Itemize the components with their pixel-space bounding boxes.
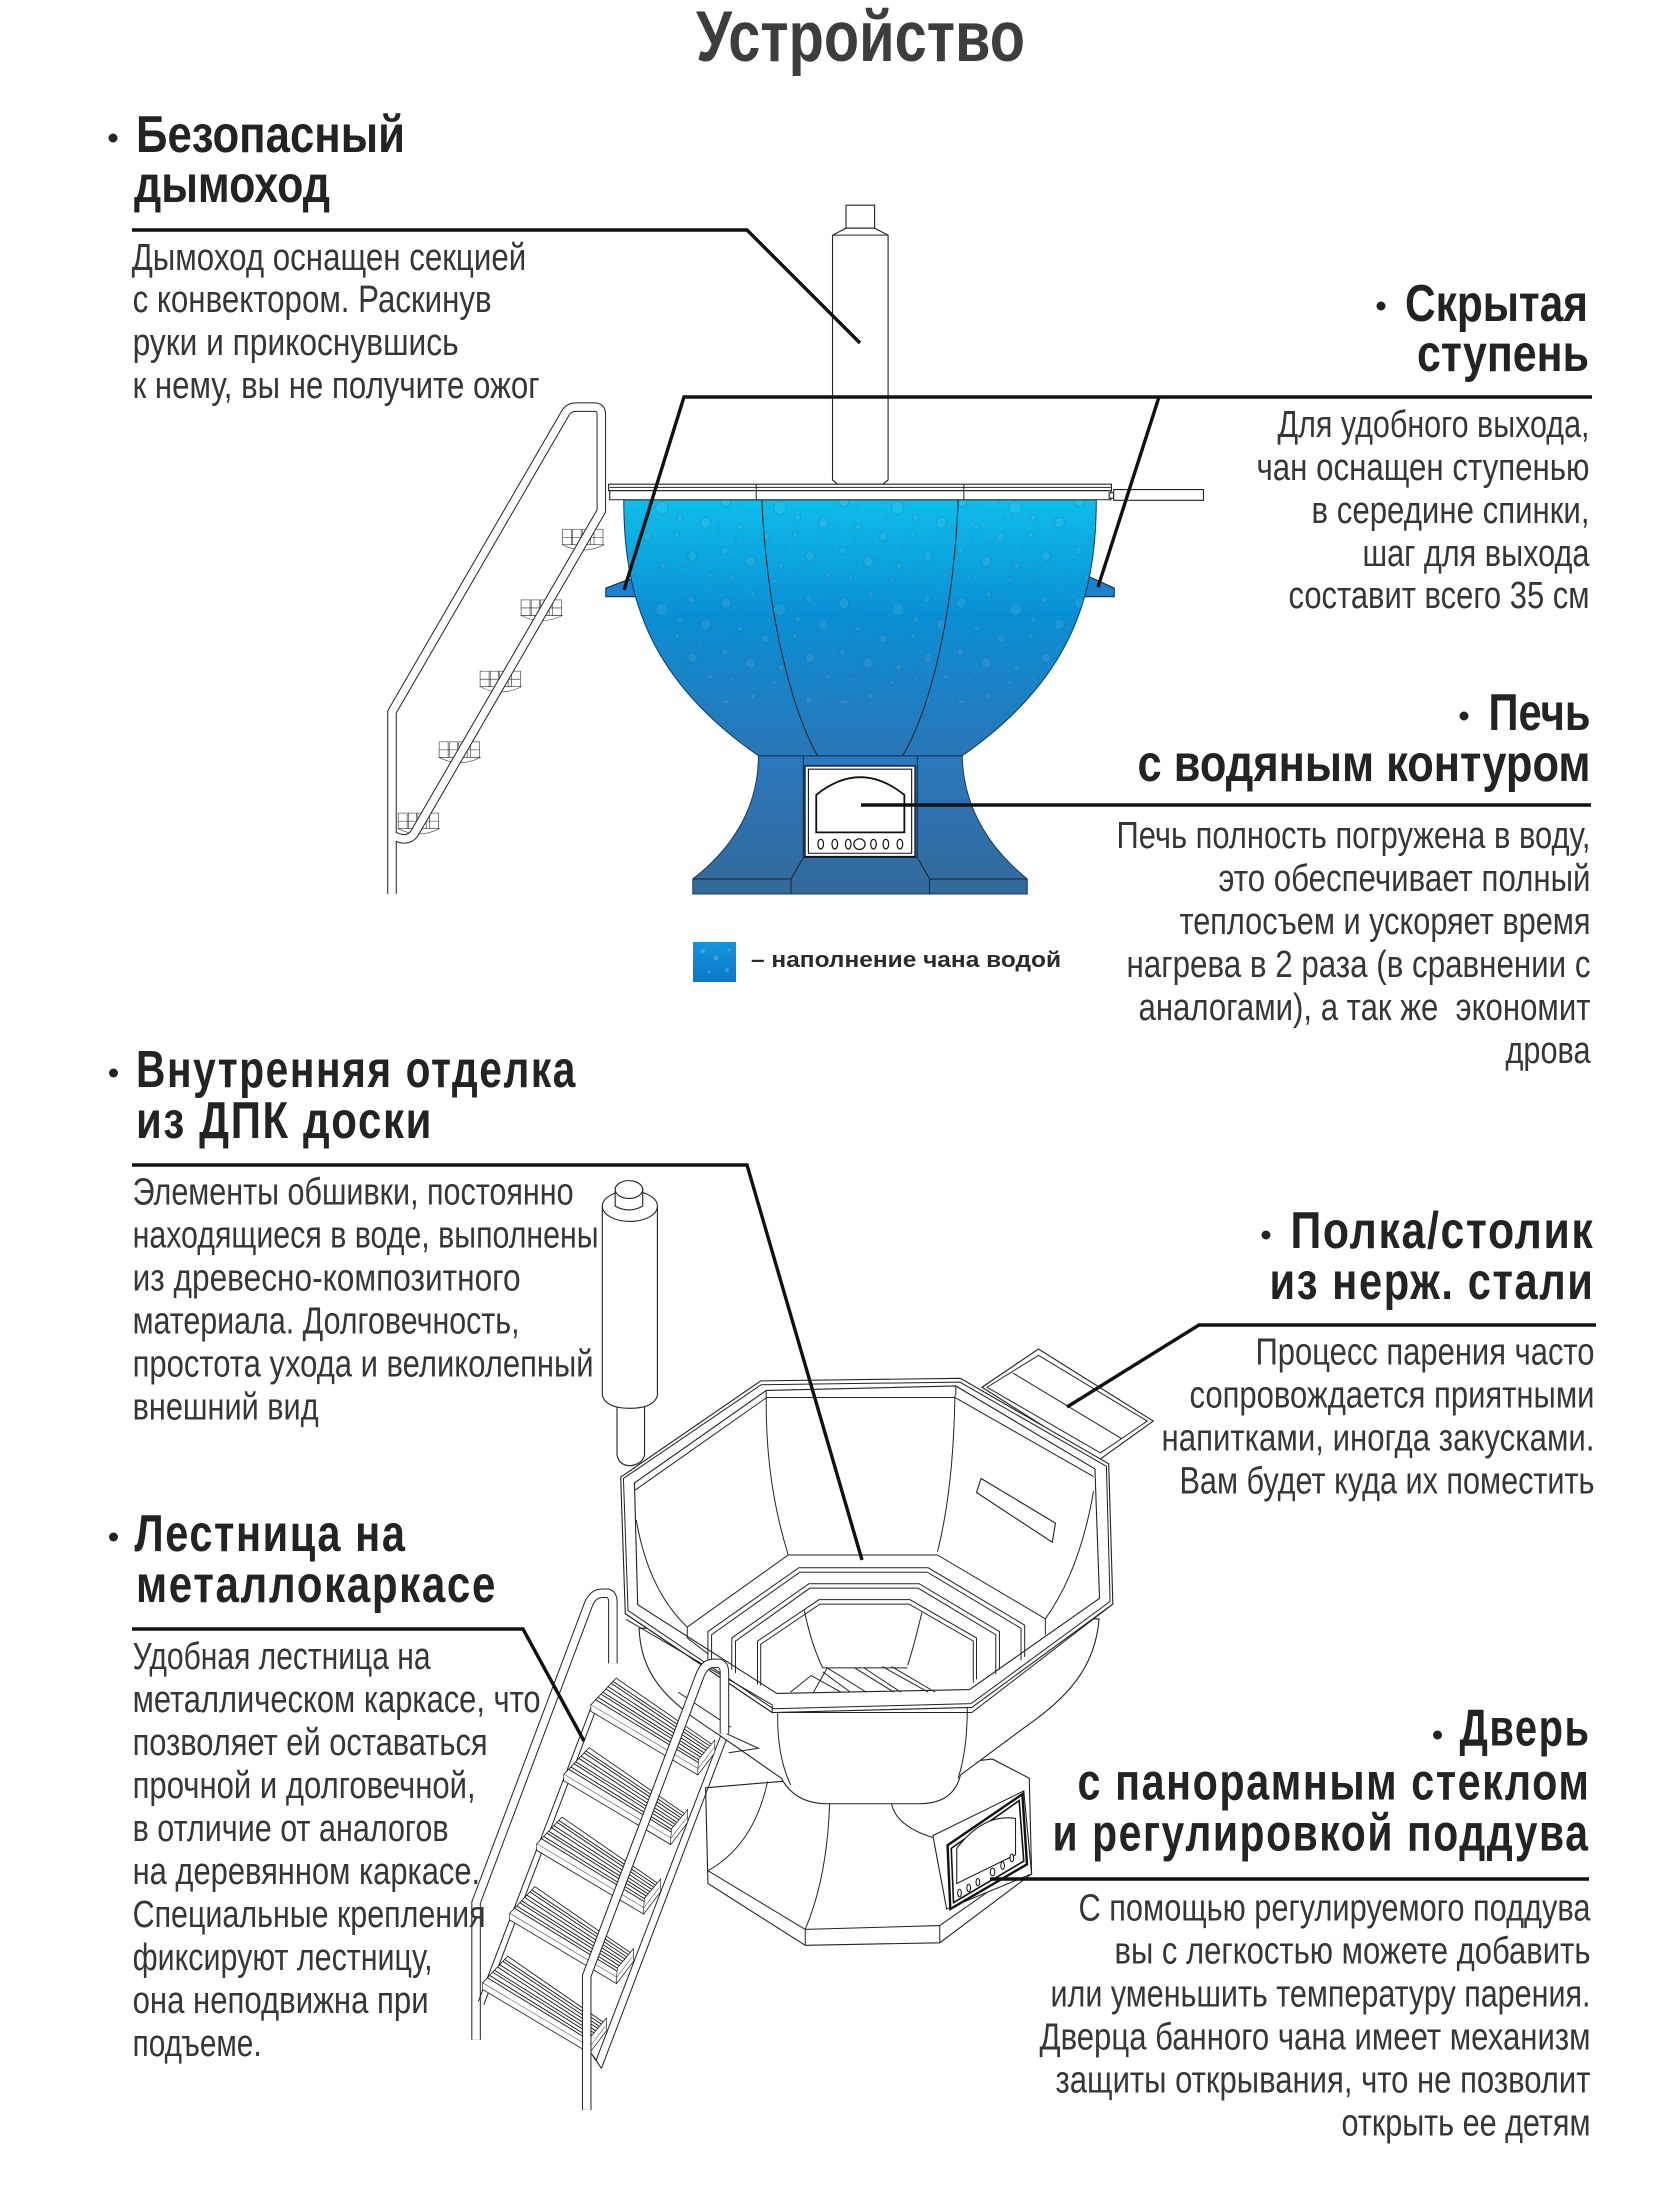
heading <box>134 106 405 214</box>
small bracket <box>678 1692 758 1753</box>
text block: с конвектором. Раскинув <box>133 279 492 321</box>
heading: Скрытая <box>1405 275 1588 333</box>
stairs <box>476 1593 726 2110</box>
stove door <box>933 1791 1032 1909</box>
text block: простота ухода и великолепный <box>133 1343 594 1385</box>
text block: Удобная лестница на <box>133 1636 431 1678</box>
panel: shelf <box>1067 1202 1596 1502</box>
text block: позволяет ей оставаться <box>133 1722 488 1764</box>
heading <box>136 1041 577 1150</box>
text block: аналогами), а так же экономит <box>1138 987 1590 1029</box>
heading <box>1138 684 1590 793</box>
text block <box>1040 1887 1591 2144</box>
heading <box>1405 275 1589 383</box>
wall niche <box>976 1478 1055 1542</box>
heading: Дверь <box>1460 1699 1590 1757</box>
leader lines <box>624 397 1592 590</box>
panel: door <box>990 1699 1591 2144</box>
heading: Внутренняя отделка <box>136 1041 577 1099</box>
text block: дрова <box>1506 1030 1591 1072</box>
heading: с водяным контуром <box>1138 735 1590 793</box>
heading: ступень <box>1417 325 1589 383</box>
text block <box>133 1171 599 1428</box>
steel shelf <box>982 1349 1153 1461</box>
text block: Вам будет куда их поместить <box>1180 1460 1594 1502</box>
heading: из нерж. стали <box>1270 1253 1594 1311</box>
text block: находящиеся в воде, выполнены <box>133 1214 599 1256</box>
title: Устройство <box>696 0 1025 77</box>
text block: руки и прикоснувшись <box>133 322 459 364</box>
text block: вы с легкостью можете добавить <box>1114 1930 1590 1972</box>
floor slats <box>791 1667 935 1692</box>
panel: chimney <box>108 106 860 407</box>
heading: Полка/столик <box>1290 1202 1594 1260</box>
panel: stove <box>861 684 1591 1072</box>
text block: фиксируют лестницу, <box>133 1937 433 1979</box>
text block: нагрева в 2 раза (в сравнении с <box>1126 944 1590 986</box>
text block: чан оснащен ступенью <box>1256 447 1590 489</box>
heading: Лестница на <box>134 1505 406 1563</box>
illustration: isometric tub with ladder <box>476 1181 1153 2110</box>
panel: inner finish <box>109 1041 862 1560</box>
heading <box>134 1505 497 1614</box>
text block: Для удобного выхода, <box>1278 404 1590 446</box>
text block <box>1256 404 1590 617</box>
text block <box>133 1636 541 2065</box>
text block: составит всего 35 см <box>1288 575 1590 617</box>
text block: Элементы обшивки, постоянно <box>133 1171 574 1213</box>
side shelf <box>1109 490 1203 500</box>
text block: Дымоход оснащен секцией <box>132 237 526 279</box>
text block <box>1116 815 1591 1072</box>
legend: water fill <box>693 942 1061 982</box>
stove door <box>805 766 915 856</box>
heading: дымоход <box>134 156 330 214</box>
leader line <box>990 1877 1589 1881</box>
ladder side view <box>392 407 604 894</box>
illustration: side section of the filled tub <box>392 205 1203 894</box>
leader line <box>132 1629 584 1741</box>
tub rim <box>609 484 1111 500</box>
chimney <box>602 1181 657 1466</box>
inner bench steps <box>687 1555 1045 1686</box>
stove base <box>706 1759 1032 1945</box>
text block: внешний вид <box>133 1386 319 1428</box>
legend: water fill: – наполнение чана водой <box>751 947 1061 972</box>
heading: из ДПК доски <box>136 1092 433 1150</box>
leader line <box>861 803 1591 807</box>
text block: материала. Долговечность, <box>133 1300 520 1342</box>
text block: она неподвижна при <box>133 1980 429 2022</box>
text block: напитками, иногда закусками. <box>1162 1417 1594 1459</box>
text block: сопровождается приятными <box>1190 1374 1594 1416</box>
heading: Безопасный <box>136 106 405 164</box>
heading: металлокаркасе <box>136 1556 497 1614</box>
text block <box>132 237 540 407</box>
text block: подъеме. <box>133 2023 262 2065</box>
text block: в отличие от аналогов <box>133 1808 449 1850</box>
leader line <box>1067 1325 1596 1407</box>
octagonal rim and inner walls <box>621 1378 1113 1713</box>
heading <box>1270 1202 1594 1311</box>
text block: Процесс парения часто <box>1256 1331 1594 1373</box>
text block: теплосъем и ускоряет время <box>1180 901 1590 943</box>
chimney <box>833 205 888 484</box>
heading <box>1052 1699 1590 1862</box>
side ears of the hidden step <box>606 576 1114 597</box>
text block: открыть ее детям <box>1342 2102 1590 2144</box>
text block: к нему, вы не получите ожог <box>133 365 540 407</box>
text block: это обеспечивает полный <box>1218 858 1590 900</box>
text block: на деревянном каркасе. <box>133 1851 480 1893</box>
text block: металлическом каркасе, что <box>133 1679 541 1721</box>
front rim band <box>625 1604 1113 1713</box>
leader line <box>132 230 860 343</box>
heading: Печь <box>1488 684 1590 742</box>
text block: шаг для выхода <box>1362 533 1590 575</box>
text block: в середине спинки, <box>1312 490 1590 532</box>
tub outer bowl <box>639 1619 1099 1804</box>
text block: Специальные крепления <box>133 1894 486 1936</box>
text block <box>1162 1331 1594 1502</box>
text block: из древесно-композитного <box>133 1257 521 1299</box>
panel: ladder <box>109 1505 584 2065</box>
furnace base <box>693 756 1027 894</box>
text block: прочной и долговечной, <box>133 1765 476 1807</box>
blue bowl filled with water <box>624 500 1096 756</box>
panel: hidden step <box>624 275 1592 617</box>
leader line <box>132 1165 862 1560</box>
